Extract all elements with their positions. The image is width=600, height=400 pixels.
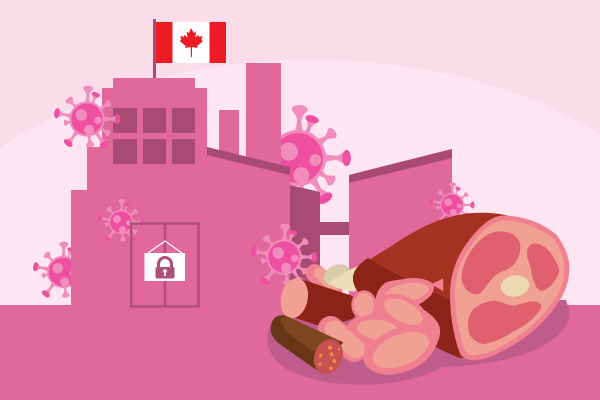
icon: padlock [156, 258, 174, 278]
ground [0, 305, 600, 400]
factory building [71, 63, 320, 306]
sausage link large [363, 320, 439, 380]
virus: on upper building [53, 86, 120, 149]
muscle bottom [468, 301, 541, 344]
sausages cluster [271, 276, 443, 380]
ham face [450, 216, 569, 360]
chimney small [219, 110, 239, 160]
sausage mass backing [346, 279, 440, 373]
dark salami body [293, 279, 357, 326]
flag red bands [156, 22, 226, 63]
windows [113, 108, 195, 164]
right building wall [349, 149, 452, 306]
door frame [131, 224, 198, 306]
sign [144, 253, 185, 281]
back sausages [315, 264, 362, 292]
flag [153, 19, 226, 79]
ham shaded underside [353, 258, 460, 358]
ham body [353, 213, 515, 358]
virus: right on wall [429, 182, 475, 226]
background hill [0, 60, 600, 310]
ham cut face meat [455, 221, 564, 355]
main block [71, 78, 290, 306]
virus: near meat [250, 224, 317, 287]
meat shadow [267, 300, 569, 385]
sausage link middle [377, 290, 430, 334]
right building [349, 149, 452, 306]
sausage link tip [431, 278, 443, 291]
door [131, 224, 198, 306]
meat group [271, 213, 569, 380]
brown salami body [271, 315, 343, 372]
flag cloth [156, 22, 226, 63]
sausage link top [380, 277, 433, 308]
chimney tall [246, 63, 281, 173]
right building roof edge [349, 149, 452, 183]
sausage link left [331, 329, 356, 349]
cream sausage [323, 264, 357, 292]
roof edge [207, 147, 290, 175]
brown salami face [309, 335, 348, 379]
sausage link centre [353, 292, 375, 318]
sausage link lower [353, 314, 404, 346]
brown salami highlight [280, 317, 340, 352]
sign hanger [148, 241, 182, 253]
brown salami [271, 315, 348, 379]
virus: left on ground [32, 241, 93, 300]
connector [320, 222, 350, 235]
virus: large behind chimneys [245, 105, 351, 206]
ham cut face rind [450, 216, 569, 360]
maple leaf [180, 28, 203, 57]
brown salami fat dots [318, 346, 340, 370]
side wall [290, 185, 320, 306]
flag pole [153, 19, 156, 79]
sausage behind inner [320, 273, 333, 287]
cream sausage front [328, 264, 362, 292]
sausage behind [315, 273, 333, 288]
dark salami end [277, 276, 312, 321]
muscle upper left [463, 232, 519, 293]
fat [499, 273, 531, 299]
virus: above door [98, 199, 144, 243]
muscle right [527, 243, 559, 291]
